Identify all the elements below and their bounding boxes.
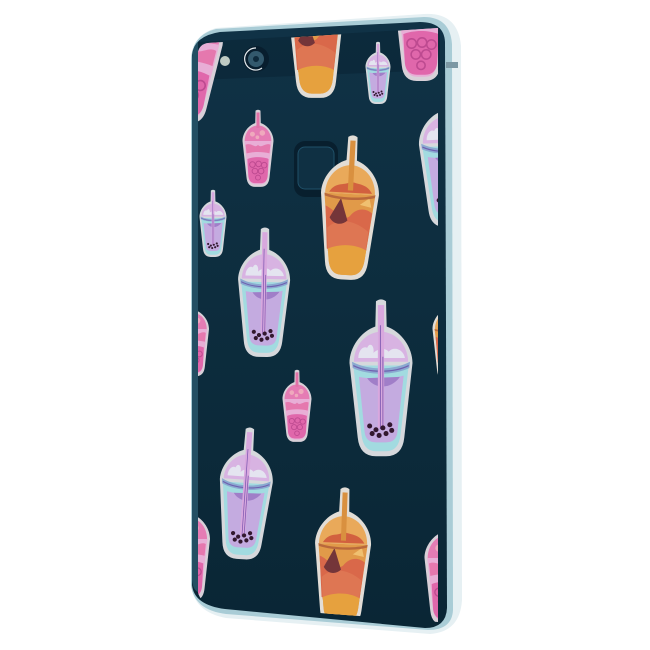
phone case inner rim [191, 17, 453, 630]
cup: small purple left [200, 190, 226, 257]
cup: small pink [242, 110, 274, 187]
left edge of back panel [192, 42, 198, 592]
camera lens [243, 46, 269, 72]
cup: purple centre left [237, 227, 291, 357]
cup: small purple top [366, 42, 390, 104]
cup: large purple right [350, 299, 412, 456]
camera flash [220, 56, 230, 66]
phone back panel [192, 22, 447, 628]
camera band [198, 28, 440, 80]
cup: pink top left [198, 42, 223, 122]
phone case outer shell [191, 14, 462, 634]
cup: orange right edge [432, 315, 438, 374]
cup: pink top right [398, 28, 438, 81]
fingerprint sensor [294, 141, 338, 197]
cup: orange bottom [315, 487, 372, 616]
cup: large orange centre [321, 135, 379, 280]
cup: orange top [291, 34, 342, 98]
printed bubble tea pattern [198, 28, 438, 622]
cup: pink bottom left [198, 517, 210, 598]
volume button ridge [446, 62, 458, 68]
cup: purple right edge [418, 112, 438, 226]
cup: small pink centre [282, 370, 312, 442]
illustration: phone in transparent case with bubble tea print [191, 14, 462, 634]
cup: pink bottom right [424, 534, 438, 622]
sensor inner square [298, 147, 334, 189]
cup: purple lower left [220, 428, 273, 560]
cup: pink left edge [198, 311, 209, 376]
